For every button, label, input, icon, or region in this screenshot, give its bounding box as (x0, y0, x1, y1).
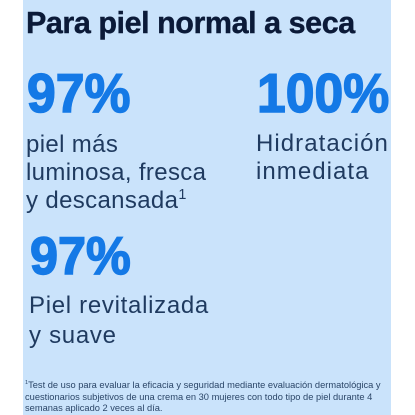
footnote: cuestionarios subjetivos de una crema en 30 mujeres con todo tipo de piel durante 4 (25, 392, 372, 402)
text: piel más luminosa: piel más (26, 131, 118, 158)
text: piel más luminosa: y descansada1 (26, 187, 187, 214)
footnote (25, 380, 381, 413)
stat: 100%: 100% (257, 62, 389, 124)
footnote: semanas aplicado 2 veces al día. (25, 403, 162, 413)
title: Para piel normal a seca (26, 6, 355, 40)
text: piel más luminosa: luminosa, fresca (26, 159, 206, 186)
text: hidratación: inmediata (256, 158, 370, 185)
text: hidratación (256, 130, 389, 185)
text: hidratación: Hidratación (256, 130, 389, 157)
text: piel revitalizada: Piel revitalizada (29, 292, 209, 319)
text: piel revitalizada (29, 292, 209, 349)
text: piel revitalizada: y suave (29, 322, 117, 349)
stat: 97% luminosa: 97% (27, 62, 130, 124)
text: piel más luminosa (26, 131, 206, 214)
footnote: 1Test de uso para evaluar la eficacia y seguridad mediante evaluación dermatológica y (25, 380, 381, 390)
stat: 97% revitalizada: 97% (30, 227, 131, 286)
